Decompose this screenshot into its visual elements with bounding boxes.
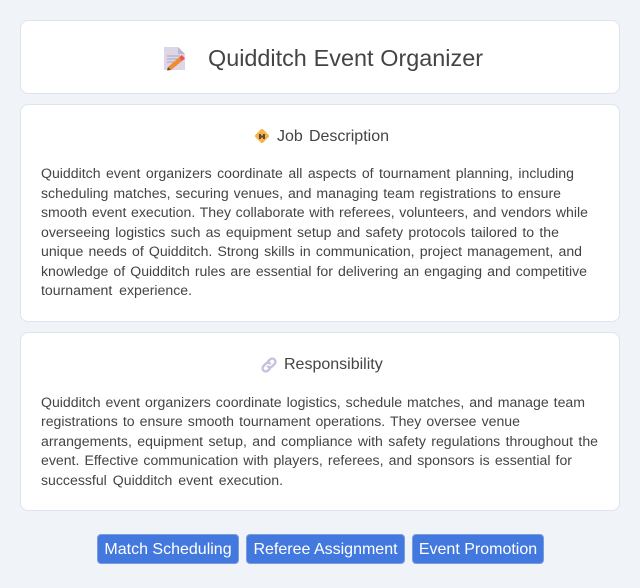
tag: referee assignment bbox=[246, 534, 405, 564]
text block: responsibility: registrations to ensure smooth tournament operations. They oversee venue bbox=[41, 413, 520, 429]
heading: responsibility: Responsibility bbox=[284, 356, 383, 373]
text block: job description: Quidditch event organizers coordinate all aspects of tournament planning, including bbox=[41, 165, 574, 181]
text block: responsibility: arrangements, equipment setup, and compliance with safety regulations throughout the bbox=[41, 433, 598, 449]
text block: responsibility: successful Quidditch event execution. bbox=[41, 472, 283, 488]
text block: responsibility bbox=[41, 394, 598, 488]
title: Quidditch Event Organizer bbox=[208, 45, 483, 71]
icon: diamond sign bbox=[255, 128, 269, 144]
icon: document with pencil bbox=[164, 47, 185, 70]
text block: job description: knowledge of Quidditch rules are essential for delivering an engaging and competitive bbox=[41, 263, 587, 279]
text block: job description bbox=[41, 165, 588, 298]
panel: job description bbox=[20, 104, 620, 322]
icon: chain link bbox=[261, 357, 277, 373]
text block: responsibility: event. Effective communication with players, referees, and sponsors is essential for bbox=[41, 452, 572, 468]
text block: job description: scheduling matches, securing venues, and managing team registrations to ensure bbox=[41, 185, 561, 201]
text block: job description: tournament experience. bbox=[41, 282, 192, 298]
heading: job description: Job Description bbox=[277, 128, 389, 145]
panel: title card bbox=[20, 20, 620, 94]
text block: job description: smooth event execution. They collaborate with referees, volunteers, and vendors while bbox=[41, 204, 588, 220]
tag: event promotion: Event Promotion bbox=[419, 541, 537, 558]
tag: event promotion bbox=[412, 534, 544, 564]
text block: responsibility: Quidditch event organizers coordinate logistics, schedule matches, and manage team bbox=[41, 394, 585, 410]
text block: job description: unique needs of Quidditch. Strong skills in communication, project management, and bbox=[41, 243, 582, 259]
panel: responsibility bbox=[20, 332, 620, 511]
tag: referee assignment: Referee Assignment bbox=[253, 541, 398, 558]
tag: match scheduling bbox=[97, 534, 239, 564]
tag: match scheduling: Match Scheduling bbox=[104, 541, 232, 558]
text block: job description: overseeing logistics such as equipment setup and safety protocols tailored to the bbox=[41, 224, 559, 240]
